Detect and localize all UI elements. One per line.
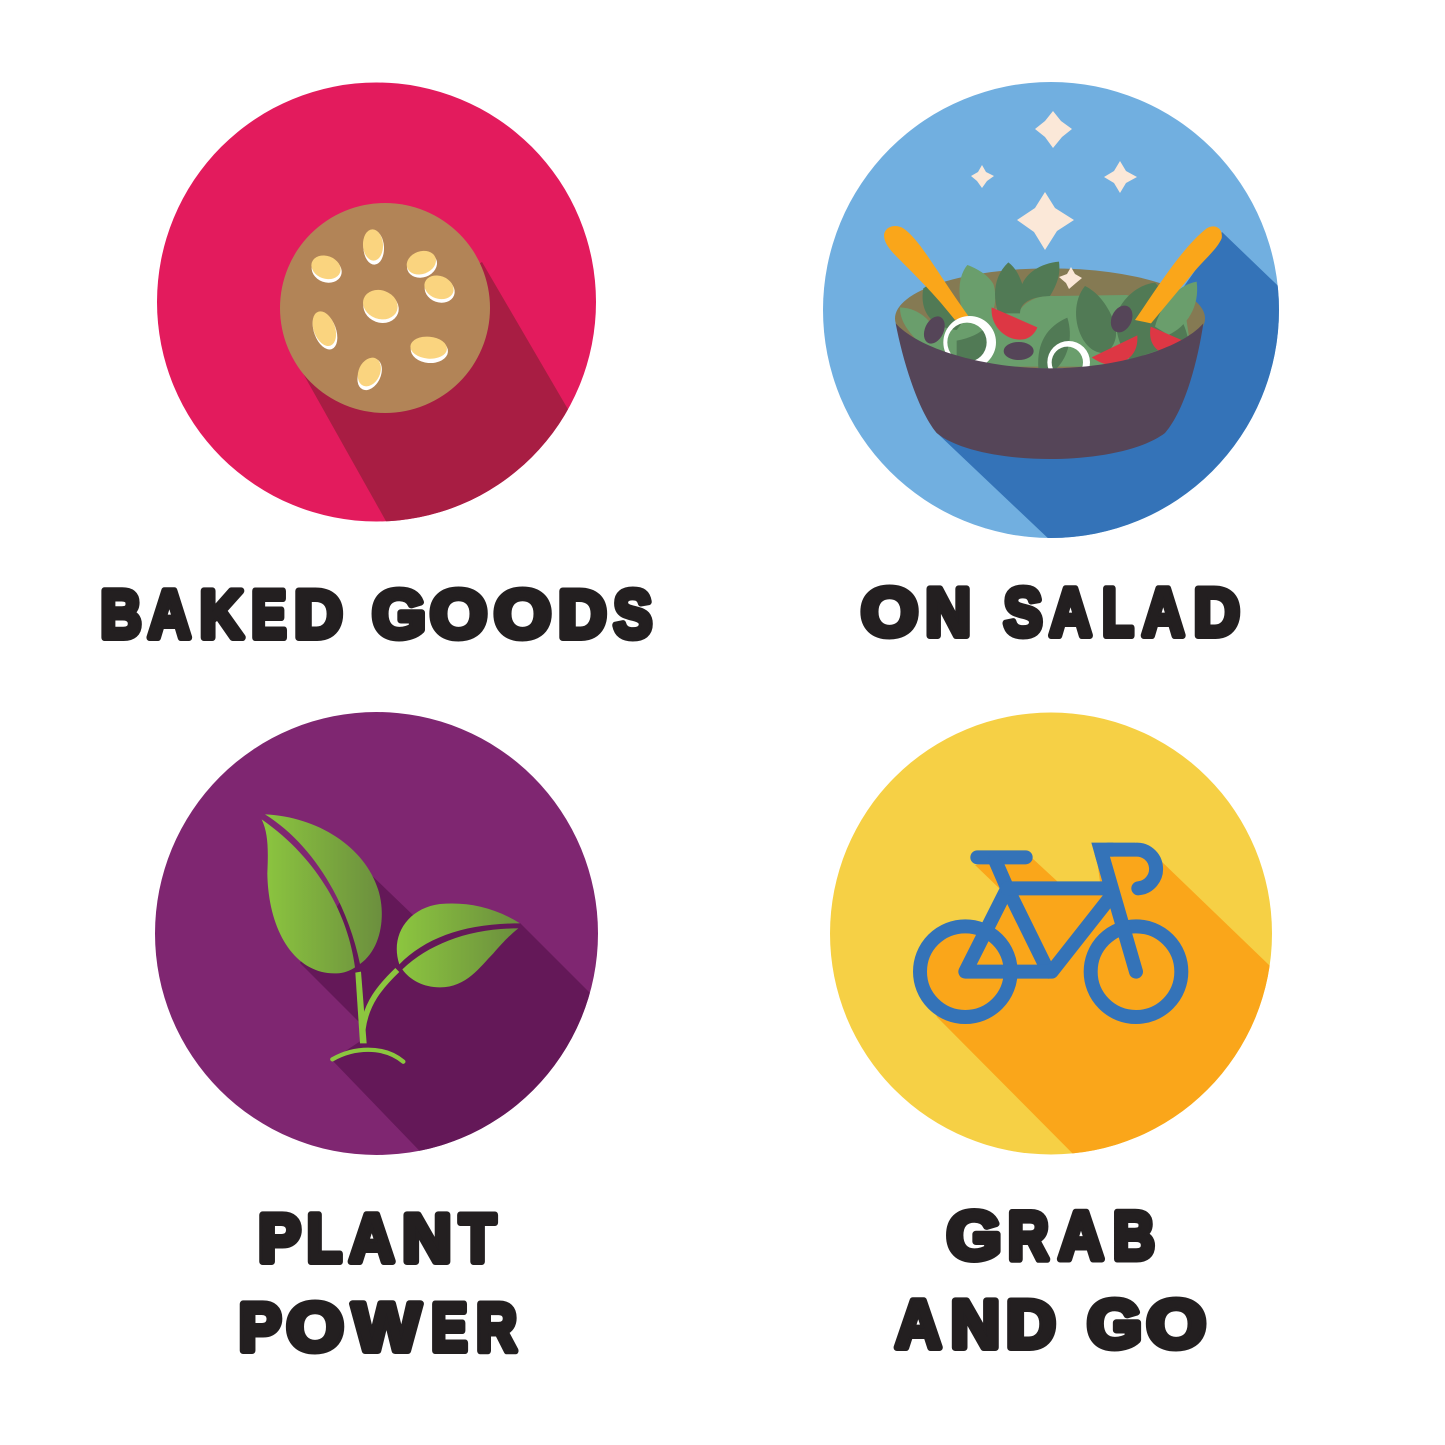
heading: on salad: A (1142, 574, 1184, 650)
circle background: yellow (830, 712, 1272, 1154)
heading: baked goods: K (200, 576, 243, 652)
heading: grab: G (947, 1198, 1001, 1274)
heading: power: W (353, 1290, 421, 1366)
heading: baked goods: D (558, 576, 606, 652)
heading: and go: D (1006, 1286, 1056, 1362)
circle background: pink (157, 82, 596, 522)
heading: on salad: N (926, 574, 971, 650)
heading: baked goods: O (430, 576, 487, 652)
heading: baked goods: G (372, 576, 426, 652)
heading: and go: G (1087, 1286, 1142, 1362)
heading: and go: O (1147, 1286, 1206, 1362)
icon: salad bowl (884, 226, 1222, 459)
almonds on cookie (308, 229, 458, 394)
heading: plant: T (460, 1200, 496, 1276)
heading: plant: P (258, 1200, 301, 1276)
heading: on salad: D (1194, 574, 1240, 650)
heading: on salad: A (1050, 574, 1092, 650)
circle background: purple (155, 712, 598, 1155)
heading: plant: A (349, 1200, 394, 1276)
icon: bicycle (920, 843, 1181, 1017)
heading: and go: N (951, 1286, 1000, 1362)
heading: plant: L (307, 1200, 342, 1276)
heading: power: P (239, 1290, 281, 1366)
icon: cookie (280, 203, 490, 413)
icon: sparkles (971, 111, 1137, 289)
heading: plant: N (402, 1200, 452, 1276)
heading: grab: R (1008, 1198, 1049, 1274)
heading: power: O (287, 1290, 344, 1366)
heading: on salad: L (1102, 574, 1134, 650)
heading: on salad: S (1004, 574, 1042, 650)
panel: grab and go (830, 712, 1290, 1362)
long shadow: cookie (304, 262, 568, 522)
heading: power: R (476, 1290, 517, 1366)
heading: grab: B (1113, 1198, 1155, 1274)
circle background: blue (823, 82, 1279, 538)
heading: baked goods: E (251, 576, 286, 652)
long shadow: bowl (938, 232, 1279, 538)
icon: sprout (262, 814, 520, 1062)
heading: power: E (431, 1290, 468, 1366)
panel: baked goods (100, 82, 652, 652)
heading: and go: A (895, 1286, 941, 1362)
heading: baked goods: D (294, 576, 342, 652)
heading: baked goods: A (148, 576, 191, 652)
panel: on salad (823, 82, 1300, 650)
panel: plant power (155, 712, 600, 1366)
long shadow: bicycle (927, 856, 1270, 1154)
heading: baked goods: B (100, 576, 142, 652)
heading: on salad: O (861, 574, 918, 650)
heading: baked goods: S (614, 576, 652, 652)
heading: grab: A (1058, 1198, 1104, 1274)
heading: baked goods: O (494, 576, 551, 652)
long shadow: plant (300, 876, 590, 1151)
